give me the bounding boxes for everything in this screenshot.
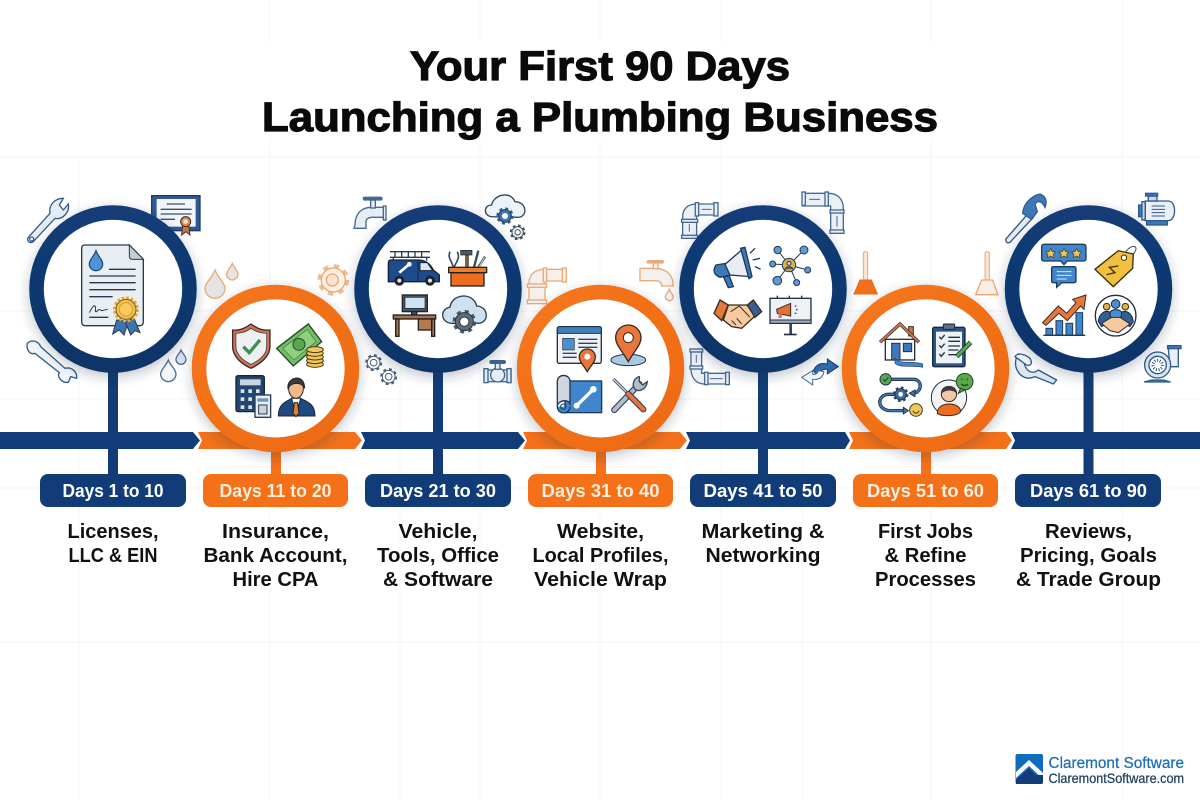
- step 6: Days 51 to 60: [849, 252, 1002, 591]
- icon: location pin: [611, 325, 646, 366]
- label: & Refine: [884, 545, 966, 567]
- label: Marketing &: [702, 521, 824, 543]
- label: Processes: [875, 569, 976, 591]
- connector stem: [108, 370, 118, 476]
- label: [377, 521, 499, 591]
- date pill: Days 11 to 20: [220, 481, 332, 501]
- title: Launching a Plumbing Business: [262, 94, 938, 140]
- date pill: [203, 474, 348, 507]
- icon: motor: [1139, 193, 1175, 225]
- label: Local Profiles,: [532, 545, 668, 567]
- title: Your First 90 Days: [410, 43, 790, 89]
- icon: growth chart: [1043, 295, 1086, 335]
- step 3: Days 21 to 30: [354, 195, 525, 591]
- icon: office desk: [393, 295, 436, 336]
- icon: checklist: [933, 324, 971, 367]
- icon: star reviews: [1042, 244, 1086, 287]
- icon: price tag: [1095, 246, 1136, 287]
- ring: [199, 292, 352, 445]
- label: [204, 521, 348, 591]
- icon: house with water: [880, 324, 923, 367]
- icon: billboard: [770, 296, 811, 335]
- icon: orange drops: [205, 263, 238, 298]
- connector stem: [921, 450, 931, 476]
- icon: orange gear: [320, 267, 347, 293]
- icon: certificate: [152, 196, 200, 235]
- ring: [1012, 212, 1165, 366]
- label: Reviews,: [1045, 521, 1132, 543]
- icon: website: [557, 327, 601, 372]
- connector stem: [758, 370, 768, 476]
- icon: filled plunger: [854, 252, 877, 294]
- label: Vehicle Wrap: [534, 569, 667, 591]
- label: Pricing, Goals: [1020, 545, 1157, 567]
- ring: [362, 212, 514, 366]
- label: LLC & EIN: [68, 545, 158, 567]
- timeline arrow bar: [0, 432, 1200, 449]
- label: [702, 521, 824, 567]
- date pill: [853, 474, 998, 507]
- connector stem: [1084, 370, 1094, 476]
- icon: network: [770, 246, 811, 286]
- date pill: [40, 474, 186, 507]
- connector stem: [596, 450, 606, 476]
- icon: water drops: [161, 350, 186, 382]
- label: Tools, Office: [377, 545, 499, 567]
- label: Bank Account,: [204, 545, 348, 567]
- icon: happy customer: [931, 373, 973, 416]
- step 5: Days 41 to 50: [682, 192, 844, 567]
- connector stem: [433, 370, 443, 476]
- date pill: [690, 474, 836, 507]
- date pill: Days 41 to 50: [704, 481, 822, 501]
- label: Vehicle,: [398, 521, 478, 543]
- brand text: [1048, 755, 1184, 786]
- date pill: Days 61 to 90: [1030, 481, 1147, 501]
- icon: orange dripping faucet: [640, 261, 673, 301]
- icon: outline plunger: [976, 252, 998, 295]
- label: [68, 521, 158, 567]
- title: [262, 43, 938, 140]
- ring: [686, 212, 840, 366]
- label: Insurance,: [222, 521, 329, 543]
- label: & Trade Group: [1016, 569, 1161, 591]
- label: Hire CPA: [232, 569, 318, 591]
- label: [1016, 521, 1161, 591]
- icon: cloud with gears: [485, 195, 525, 239]
- icon: orange elbow pipe: [527, 268, 566, 304]
- step 2: Days 11 to 20: [199, 263, 352, 591]
- date pill: Days 31 to 40: [542, 481, 660, 501]
- icon: blue pipe top left: [682, 203, 718, 238]
- date pill: [528, 474, 673, 507]
- date pill: Days 21 to 30: [380, 481, 496, 501]
- icon: cloud software: [443, 296, 486, 331]
- icon: pump: [1144, 346, 1181, 382]
- icon: vehicle wrap blueprint: [557, 375, 602, 413]
- icon: toolbox: [449, 250, 487, 286]
- icon: calculator: [236, 376, 271, 417]
- logo: Claremont Software: [1016, 754, 1184, 786]
- connector stem: [271, 450, 281, 476]
- label: Website,: [557, 521, 644, 543]
- label: [875, 521, 976, 591]
- label: Licenses,: [68, 521, 158, 543]
- icon: wrench top: [28, 198, 69, 242]
- icon: process flow: [880, 374, 922, 416]
- icon: faucet: [354, 197, 386, 228]
- icon: logo mark: [1016, 754, 1043, 784]
- step 7: Days 61 to 90: [1006, 193, 1181, 591]
- brand text: Claremont Software: [1048, 755, 1184, 772]
- icon: drain trap: [1015, 354, 1057, 384]
- date pill: [365, 474, 511, 507]
- date pill: Days 1 to 10: [62, 481, 164, 501]
- step 4: Days 31 to 40: [524, 261, 677, 591]
- icon: exchange arrows: [802, 359, 838, 385]
- icon: megaphone: [714, 247, 761, 288]
- label: Networking: [706, 545, 820, 567]
- icon: blue pipe top right: [802, 192, 844, 233]
- label: First Jobs: [878, 521, 973, 543]
- icon: handshake: [714, 300, 762, 328]
- date pill: Days 51 to 60: [867, 481, 984, 501]
- icon: money and coins: [277, 324, 323, 367]
- icon: pipe wrench: [1006, 194, 1046, 243]
- icon: accountant: [278, 378, 315, 417]
- icon: wrench bottom: [27, 341, 77, 382]
- brand text: ClaremontSoftware.com: [1048, 770, 1184, 786]
- ring: [36, 212, 190, 366]
- ring: [849, 292, 1002, 445]
- label: & Software: [383, 569, 493, 591]
- icon: blue pipe bottom: [690, 349, 729, 385]
- label: [532, 521, 668, 591]
- icon: crossed tools: [613, 377, 647, 410]
- step 1: Days 1 to 10: [27, 196, 200, 567]
- date pill: [1015, 474, 1161, 507]
- ring: [524, 292, 677, 445]
- icon: shield: [233, 324, 270, 368]
- icon: valve: [484, 361, 511, 383]
- icon: work van: [388, 252, 439, 286]
- icon: small gears: [367, 356, 396, 384]
- icon: trade group: [1095, 295, 1136, 336]
- icon: licence document: [82, 245, 143, 335]
